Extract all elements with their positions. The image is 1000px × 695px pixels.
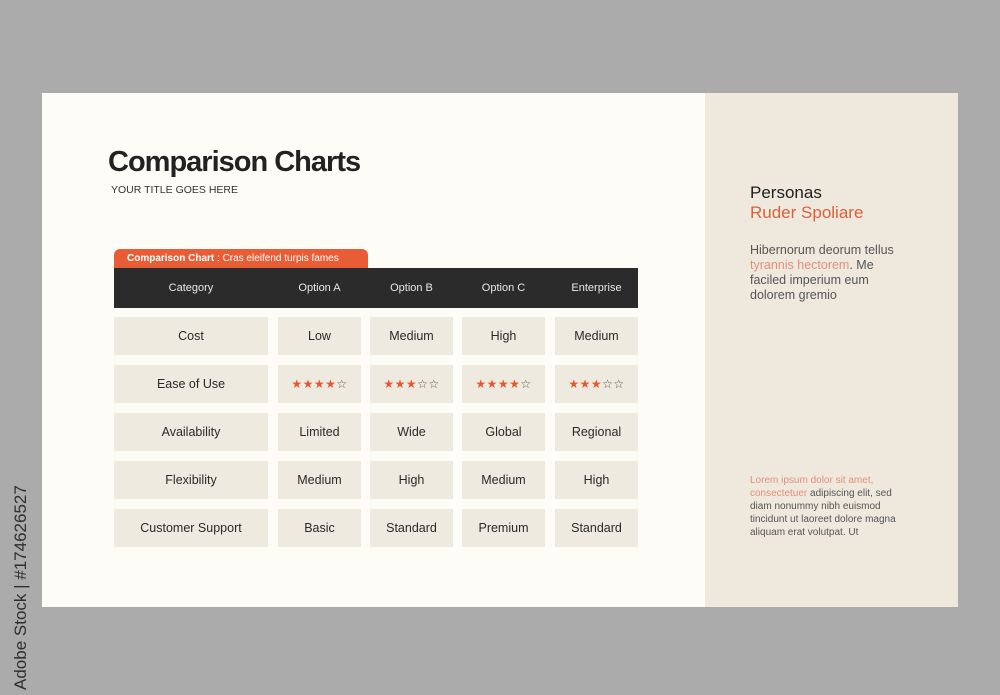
side heading xyxy=(750,183,863,222)
row: cost: Cost xyxy=(178,329,204,343)
table: Regional xyxy=(572,425,621,439)
row: ease of use: Ease of Use xyxy=(157,377,225,391)
side heading: Personas xyxy=(750,183,822,202)
table: ☆ xyxy=(520,377,532,391)
slide main panel xyxy=(42,93,705,607)
side body text: faciled imperium eum xyxy=(750,273,869,287)
table: ☆☆ xyxy=(602,377,625,391)
table: ★★★ xyxy=(383,377,417,391)
table: Medium xyxy=(297,473,342,487)
table: Standard xyxy=(386,521,437,535)
table: Enterprise xyxy=(571,282,622,294)
side footnote: Lorem ipsum dolor sit amet, xyxy=(750,475,873,486)
side panel xyxy=(705,93,958,607)
title: Comparison Charts xyxy=(108,146,360,178)
table tab xyxy=(114,249,368,270)
row: flexibility: Flexibility xyxy=(165,473,217,487)
table: ★★★★ xyxy=(291,377,336,391)
table: Option B xyxy=(390,282,433,294)
table: Standard xyxy=(571,521,622,535)
subtitle: YOUR TITLE GOES HERE xyxy=(111,184,238,196)
table: Low xyxy=(308,329,331,343)
row: flexibility xyxy=(114,461,268,499)
table: Medium xyxy=(389,329,434,343)
row: ease of use xyxy=(114,365,268,403)
table: Limited xyxy=(299,425,340,439)
table: High xyxy=(399,473,424,487)
side footnote xyxy=(750,475,896,538)
side footnote: diam nonummy nibh euismod xyxy=(750,501,881,512)
table: Premium xyxy=(478,521,528,535)
table: Medium xyxy=(574,329,619,343)
row: customer support: Customer Support xyxy=(140,521,242,535)
side footnote: tincidunt ut laoreet dolore magna xyxy=(750,514,896,525)
side body text: Hibernorum deorum tellus xyxy=(750,243,894,257)
header row xyxy=(114,268,638,308)
table: High xyxy=(584,473,609,487)
side footnote: aliquam erat volutpat. Ut xyxy=(750,527,858,538)
watermark id vertical text: Adobe Stock | #174626527 xyxy=(11,485,30,690)
table: Wide xyxy=(397,425,426,439)
table: ☆ xyxy=(336,377,348,391)
table: Medium xyxy=(481,473,526,487)
table: Option A xyxy=(298,282,341,294)
table: ☆☆ xyxy=(417,377,440,391)
table tab: Comparison Chart : Cras eleifend turpis fames xyxy=(127,253,339,264)
row: availability xyxy=(114,413,268,451)
table: ★★★★ xyxy=(475,377,520,391)
side footnote: consectetuer adipiscing elit, sed xyxy=(750,488,892,499)
side body text xyxy=(750,243,894,302)
side heading: Ruder Spoliare xyxy=(750,203,863,222)
side body text: dolorem gremio xyxy=(750,288,837,302)
side body text: tyrannis hectorem. Me xyxy=(750,258,874,272)
row: cost xyxy=(114,317,268,355)
table: ★★★ xyxy=(568,377,602,391)
table: Option C xyxy=(482,282,525,294)
row: availability: Availability xyxy=(162,425,220,439)
table: High xyxy=(491,329,516,343)
row: customer support xyxy=(114,509,268,547)
table: Category xyxy=(169,282,213,294)
table: Basic xyxy=(304,521,335,535)
table: Global xyxy=(485,425,522,439)
